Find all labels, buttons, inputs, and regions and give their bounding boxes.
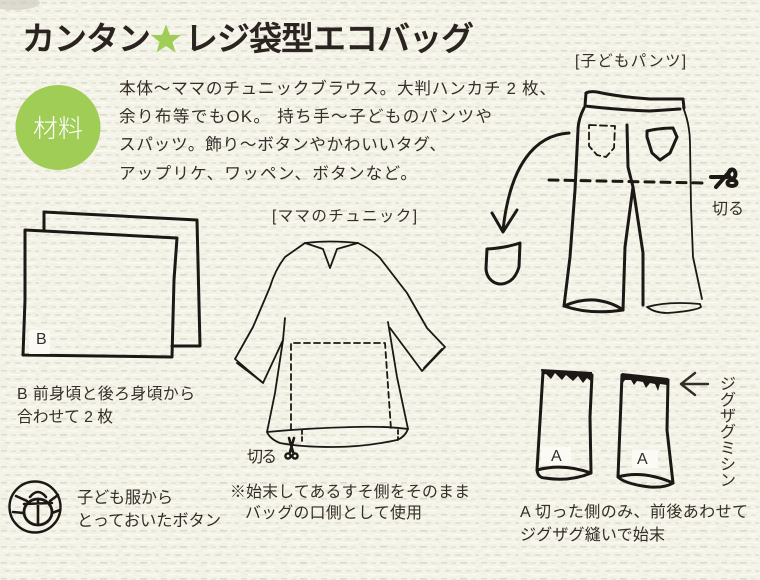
- handle right: A: [637, 451, 648, 468]
- icon: scissors bottom: [285, 438, 298, 459]
- handle left: A: [551, 448, 562, 465]
- badge: materials: [16, 85, 100, 170]
- cut line on pants: [549, 180, 703, 183]
- materials text block: アップリケ、ワッペン、ボタンなど。: [119, 164, 417, 183]
- pocket on pants: [647, 128, 677, 160]
- badge: materials: 材料: [33, 115, 83, 143]
- illustration: fabric pieces B: B: [36, 331, 47, 348]
- materials text block: スパッツ。飾り〜ボタンやかわいいタグ、: [119, 135, 446, 154]
- illustration: cut pocket: [486, 243, 520, 284]
- note: hem used as bag opening: バッグの口側として使用: [245, 504, 422, 522]
- icon: green star: [151, 24, 181, 52]
- illustration: handle pieces A: [537, 369, 673, 487]
- arrow: zigzag pointer: [681, 373, 708, 395]
- dashed pocket on pants: [589, 125, 615, 157]
- arrow: pocket moved down: [492, 133, 569, 232]
- label: cut (right): 切る: [712, 200, 744, 218]
- title: [22, 20, 474, 57]
- icon: scissors right: [711, 170, 736, 187]
- caption: A pieces: ジグザグ縫いで始末: [520, 526, 665, 544]
- label: zigzag sewing (vertical): ジグザグミシン: [717, 375, 735, 488]
- title: レジ袋型エコバッグ: [185, 20, 474, 57]
- caption: B pieces: B 前身頃と後ろ身頃から: [17, 385, 195, 403]
- caption: B pieces: [17, 385, 195, 426]
- illustration: tunic: [235, 242, 445, 447]
- materials text block: [119, 78, 556, 183]
- icon: beetle button: [10, 482, 60, 532]
- caption: button: [77, 489, 221, 530]
- heading: child's pants: [子どもパンツ]: [575, 52, 686, 70]
- title: カンタン: [22, 20, 151, 57]
- heading: mom's tunic: [ママのチュニック]: [272, 207, 417, 225]
- caption: A pieces: [520, 503, 748, 544]
- label: cut (bottom): 切る: [247, 448, 277, 466]
- note: hem used as bag opening: ※始末してあるすそ側をそのまま: [230, 483, 470, 501]
- materials text block: 本体〜ママのチュニックブラウス。大判ハンカチ 2 枚、: [119, 78, 556, 98]
- note: hem used as bag opening: [230, 483, 470, 522]
- caption: B pieces: 合わせて 2 枚: [17, 408, 113, 426]
- dashed cutting rectangle: [291, 343, 391, 430]
- illustration: fabric pieces B: [23, 212, 200, 357]
- illustration: child's pants: [564, 92, 702, 313]
- caption: button: 子ども服から: [77, 489, 173, 507]
- materials text block: 余り布等でもOK。 持ち手〜子どものパンツや: [119, 107, 492, 126]
- caption: A pieces: A 切った側のみ、前後あわせて: [520, 503, 748, 521]
- caption: button: とっておいたボタン: [77, 512, 221, 530]
